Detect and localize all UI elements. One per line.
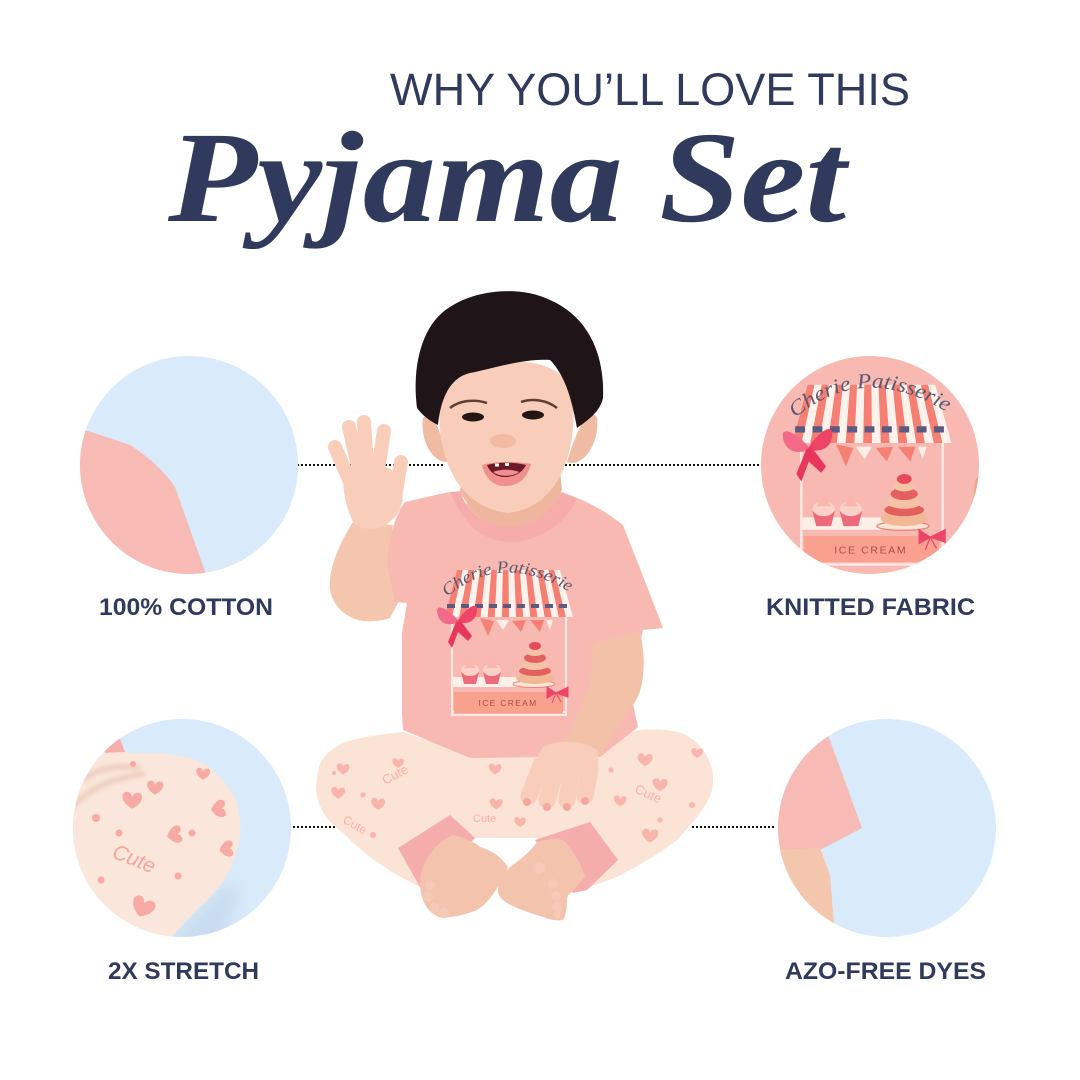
pyjama trousers: Cute	[379, 762, 411, 788]
pyjama trousers: Cute	[473, 813, 496, 825]
title: WHY YOU’LL LOVE THIS	[390, 64, 910, 115]
shirt print: shop	[437, 561, 573, 716]
raised arm	[330, 522, 405, 621]
panel: 2x stretch: Cute	[109, 840, 159, 878]
hair	[416, 291, 603, 428]
title	[167, 64, 910, 250]
panel: 2x stretch: 2X STRETCH	[108, 958, 259, 985]
shirt print: shop: Cherie Patisserie	[444, 561, 572, 594]
panel: knitted fabric	[761, 356, 979, 621]
right arm and hand	[523, 632, 644, 811]
toes	[423, 862, 562, 919]
icon: shop print close-up: ICE CREAM	[834, 544, 907, 556]
pyjama trousers: Cute	[633, 781, 664, 806]
panel: azo-free dyes	[770, 719, 996, 985]
raised hand	[335, 422, 403, 529]
title: Pyjama Set	[167, 106, 850, 250]
pyjama trousers	[316, 729, 713, 893]
nose	[490, 434, 516, 448]
shirt print: shop: ICE CREAM	[479, 698, 537, 708]
panel: 100% cotton: 100% COTTON	[99, 594, 273, 621]
panel: azo-free dyes: AZO-FREE DYES	[785, 958, 986, 985]
pyjama trousers: Cute	[340, 812, 370, 837]
icon: shop print close-up	[782, 374, 952, 566]
icon: shop print close-up: Cherie Patisserie	[791, 374, 950, 415]
ears	[423, 414, 597, 463]
panel: 100% cotton	[70, 356, 298, 621]
right foot	[498, 839, 585, 920]
mouth	[482, 462, 531, 486]
panel: knitted fabric: KNITTED FABRIC	[766, 594, 975, 621]
infographic canvas	[73, 73, 996, 979]
baby figure	[316, 291, 713, 920]
head	[416, 291, 603, 513]
connector lines	[293, 465, 775, 827]
panel: 2x stretch	[60, 719, 291, 985]
face	[439, 362, 574, 513]
trouser cuffs	[398, 815, 618, 893]
eyes and brows	[450, 400, 557, 422]
left foot	[420, 835, 508, 918]
t-shirt	[387, 470, 663, 758]
